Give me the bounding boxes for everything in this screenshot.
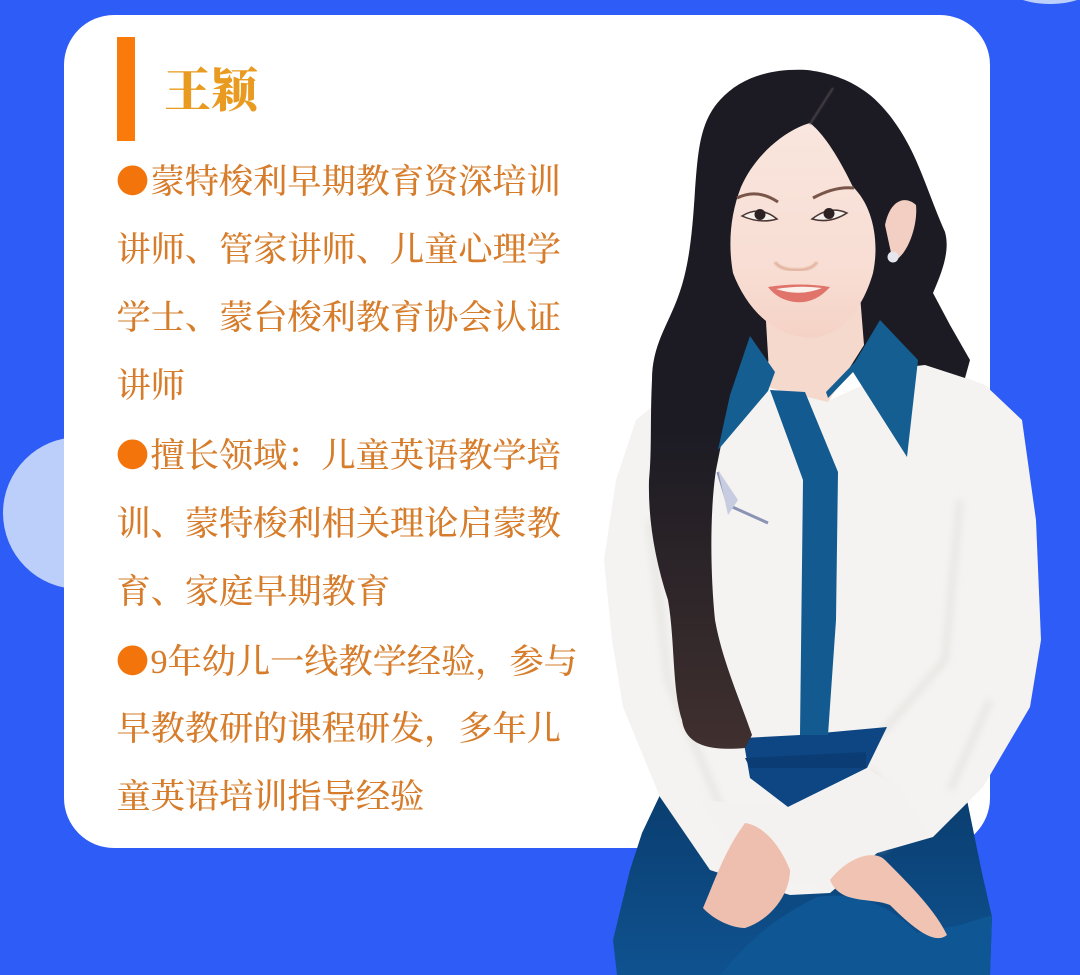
- text block: biography: 9年幼儿一线教学经验，参与: [150, 644, 578, 681]
- heading: name: 王颖: [164, 54, 258, 121]
- thigh: [720, 896, 992, 975]
- left collar: [718, 336, 775, 450]
- hair: [649, 70, 970, 749]
- text block: biography: 蒙特梭利早期教育资深培训: [150, 164, 561, 201]
- nose: [775, 262, 817, 270]
- shirt body: [604, 360, 1041, 895]
- right collar: [826, 320, 918, 457]
- text block: biography: 训、蒙特梭利相关理论启蒙教: [116, 506, 561, 543]
- shirt shading: [650, 500, 990, 850]
- text block: biography: ●: [116, 635, 149, 683]
- ear: [885, 200, 916, 262]
- text block: biography: 讲师、管家讲师、儿童心理学: [116, 232, 561, 269]
- text block: biography: ●: [116, 429, 149, 477]
- earring: [888, 252, 898, 262]
- skirt: [613, 795, 992, 975]
- text block: biography: 育、家庭早期教育: [116, 574, 390, 611]
- decorative circle: left: [3, 437, 155, 589]
- text block: biography: 童英语培训指导经验: [116, 779, 424, 816]
- text block: biography: 擅长领域：儿童英语教学培: [150, 438, 561, 475]
- placket: [770, 390, 838, 735]
- neck: [765, 295, 864, 402]
- left hand: [703, 823, 790, 928]
- eyebrows: [737, 188, 854, 202]
- eyes: [742, 208, 847, 221]
- text block: biography: 早教教研的课程研发，多年儿: [116, 711, 561, 748]
- accent bar: [117, 37, 135, 141]
- decorative circle: top right: [1000, 0, 1080, 4]
- face: [730, 123, 876, 338]
- text block: biography: [116, 155, 578, 816]
- hair part: [810, 88, 833, 124]
- text block: biography: 学士、蒙台梭利教育协会认证: [116, 300, 561, 337]
- mouth: [768, 284, 830, 302]
- panel: white card: [64, 15, 990, 848]
- forearm: [700, 768, 930, 890]
- right hand: [830, 855, 947, 938]
- text block: biography: ●: [116, 155, 149, 203]
- brooch: [718, 470, 768, 523]
- waist band: [743, 727, 887, 807]
- text block: biography: 讲师: [116, 368, 185, 405]
